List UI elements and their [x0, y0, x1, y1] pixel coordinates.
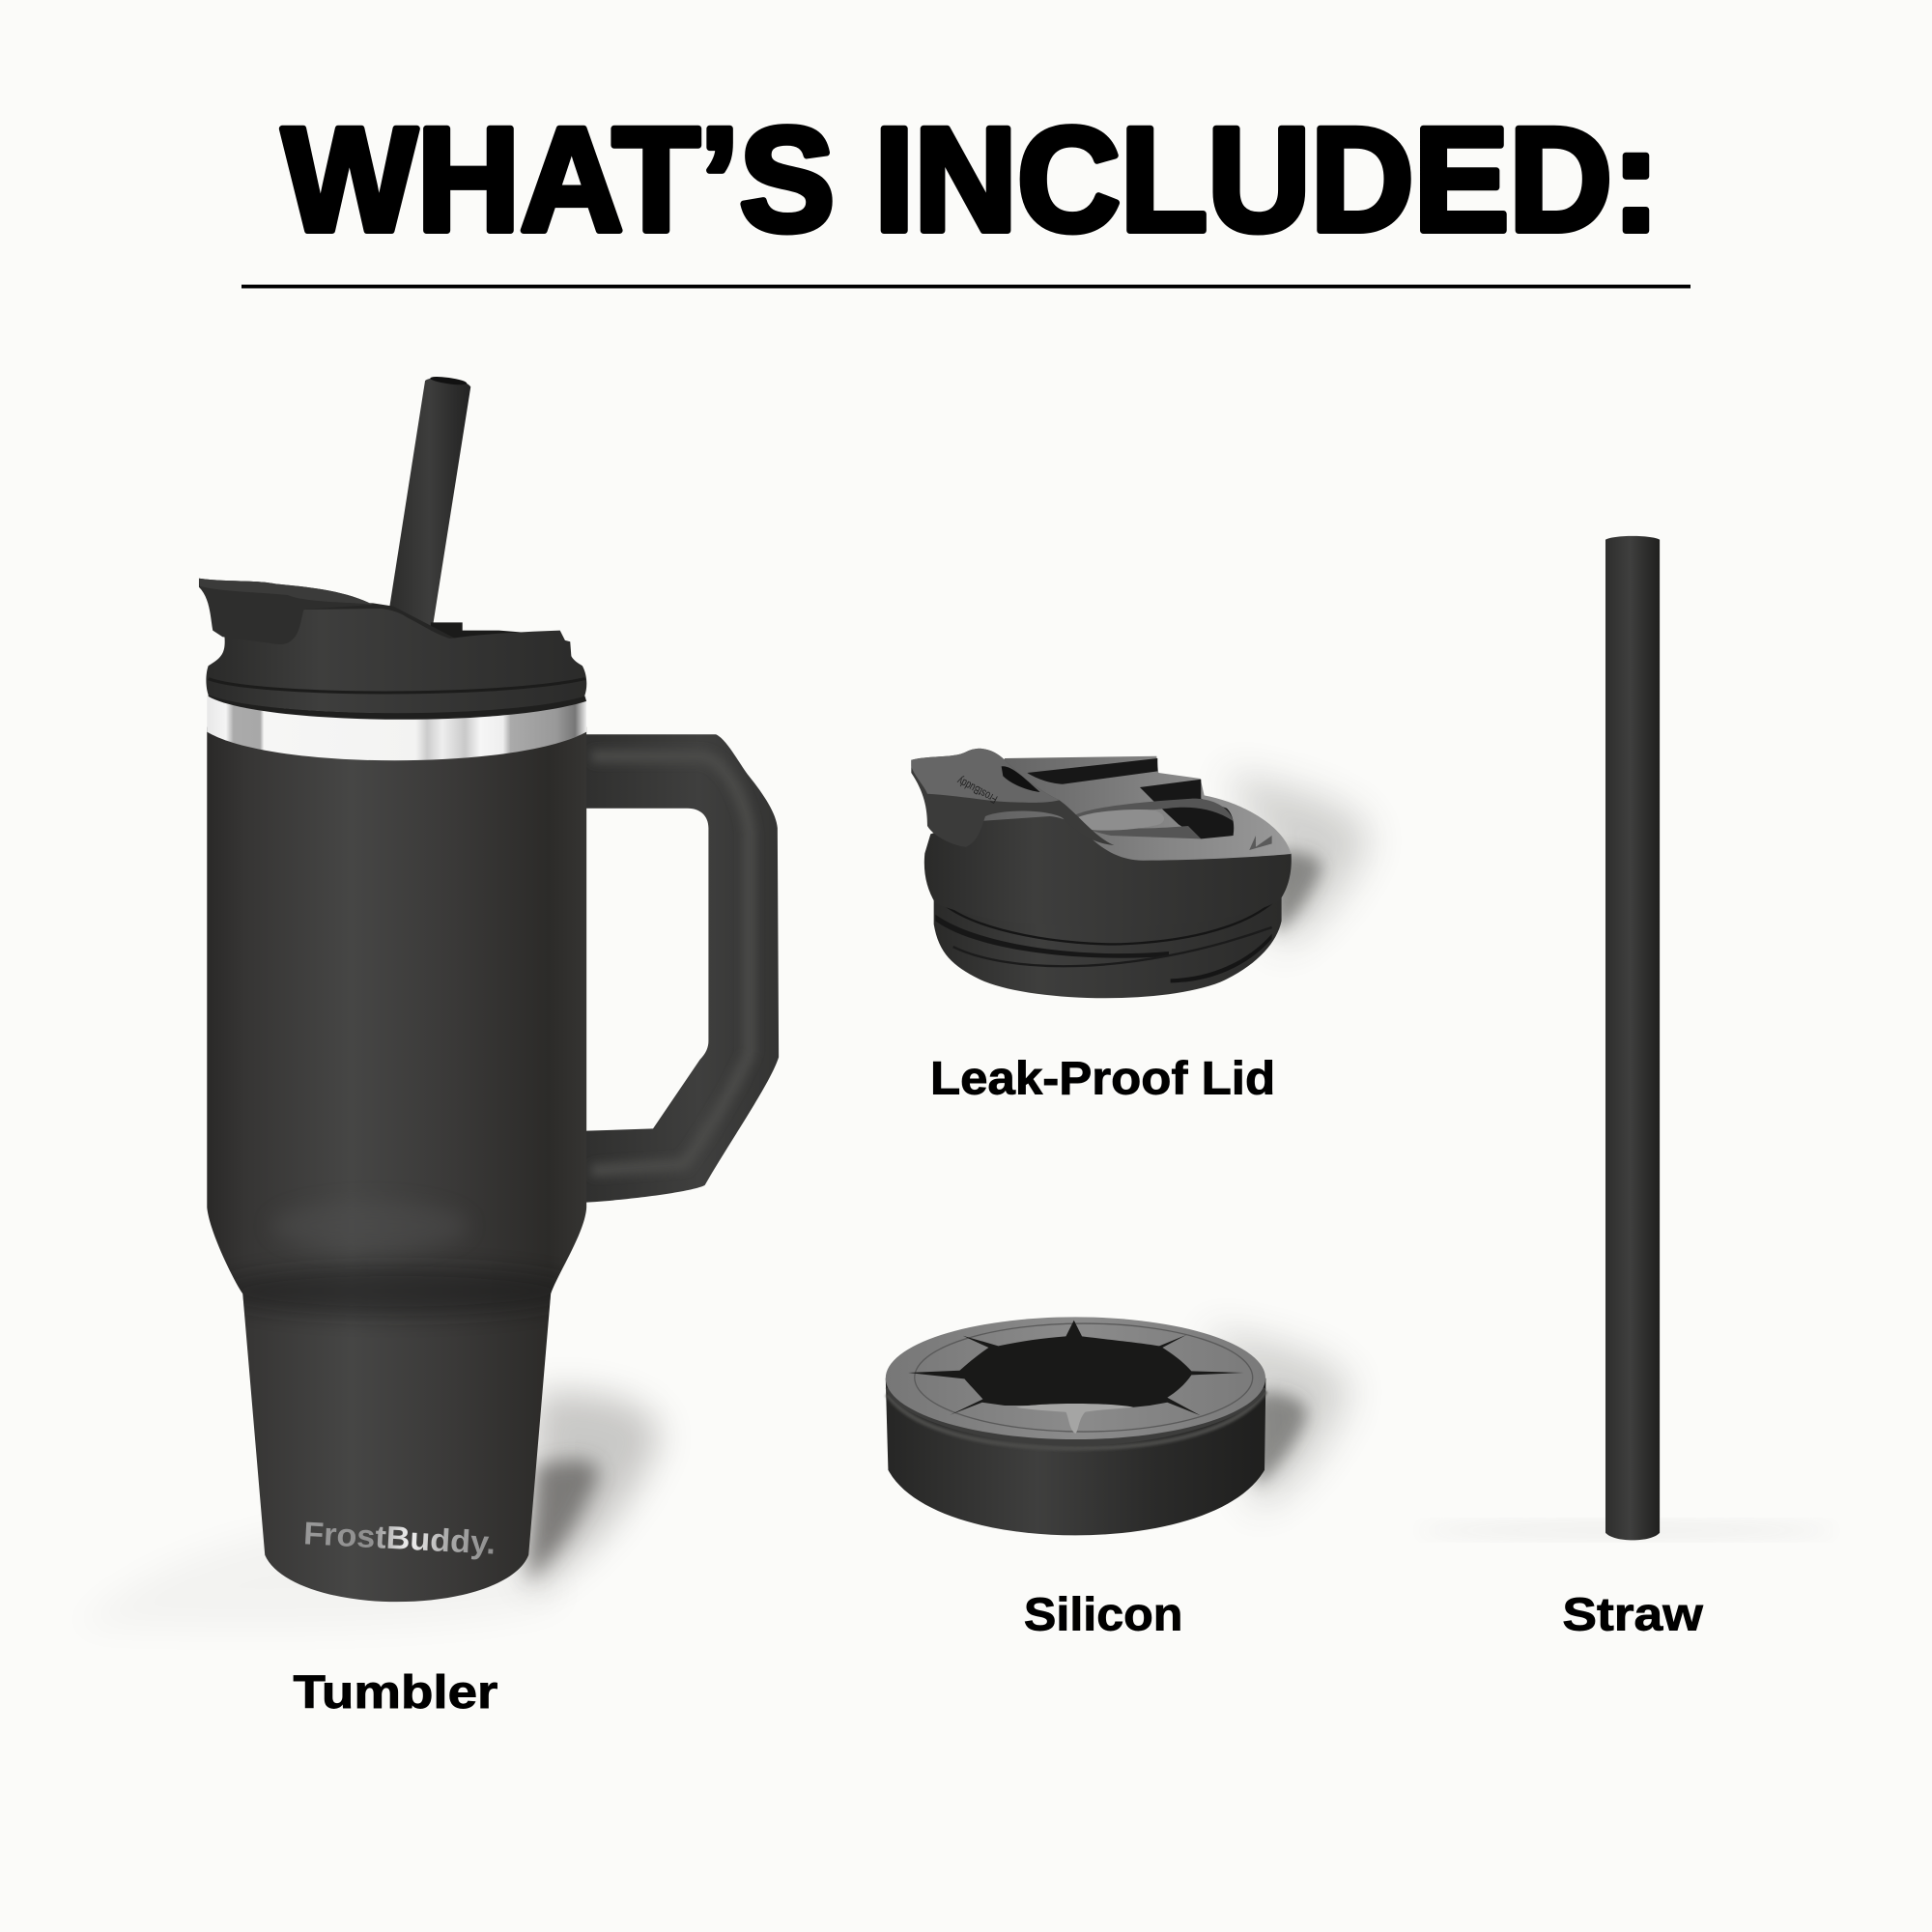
silicon label: Silicon — [1024, 1588, 1182, 1640]
lid threaded base — [934, 889, 1282, 998]
leak-proof lid — [911, 749, 1368, 998]
silicon top face — [886, 1317, 1265, 1446]
lid label: Leak-Proof Lid — [930, 1053, 1275, 1105]
tumbler lid — [199, 579, 586, 720]
straw floor shadow — [1417, 1524, 1836, 1537]
lid shadow — [1224, 773, 1368, 950]
tumbler handle — [579, 734, 779, 1203]
tumbler steel band — [207, 696, 586, 760]
tumbler ground shadow — [74, 1391, 660, 1630]
tumbler straw — [388, 375, 470, 636]
long straw — [1417, 536, 1836, 1540]
lid flap brand text: FrostBuddy — [954, 774, 1000, 807]
tumbler body — [207, 727, 586, 1602]
tumbler assembly — [74, 375, 779, 1630]
lid collar — [924, 811, 1292, 927]
straw shaft — [1605, 536, 1660, 1540]
straw label: Straw — [1562, 1588, 1703, 1640]
tumbler logo: FrostBuddy. — [302, 1516, 497, 1562]
lid top plate — [979, 756, 1292, 861]
silicon boot — [886, 1317, 1349, 1535]
lid flap — [911, 749, 1114, 847]
title underline — [242, 285, 1690, 288]
tumbler label: Tumbler — [294, 1666, 497, 1719]
silicon shadow — [1205, 1330, 1349, 1510]
lid recess — [1027, 758, 1272, 850]
title: WHAT’S INCLUDED: — [282, 98, 1660, 263]
silicon side wall — [886, 1378, 1265, 1535]
silicon star opening — [908, 1321, 1243, 1415]
